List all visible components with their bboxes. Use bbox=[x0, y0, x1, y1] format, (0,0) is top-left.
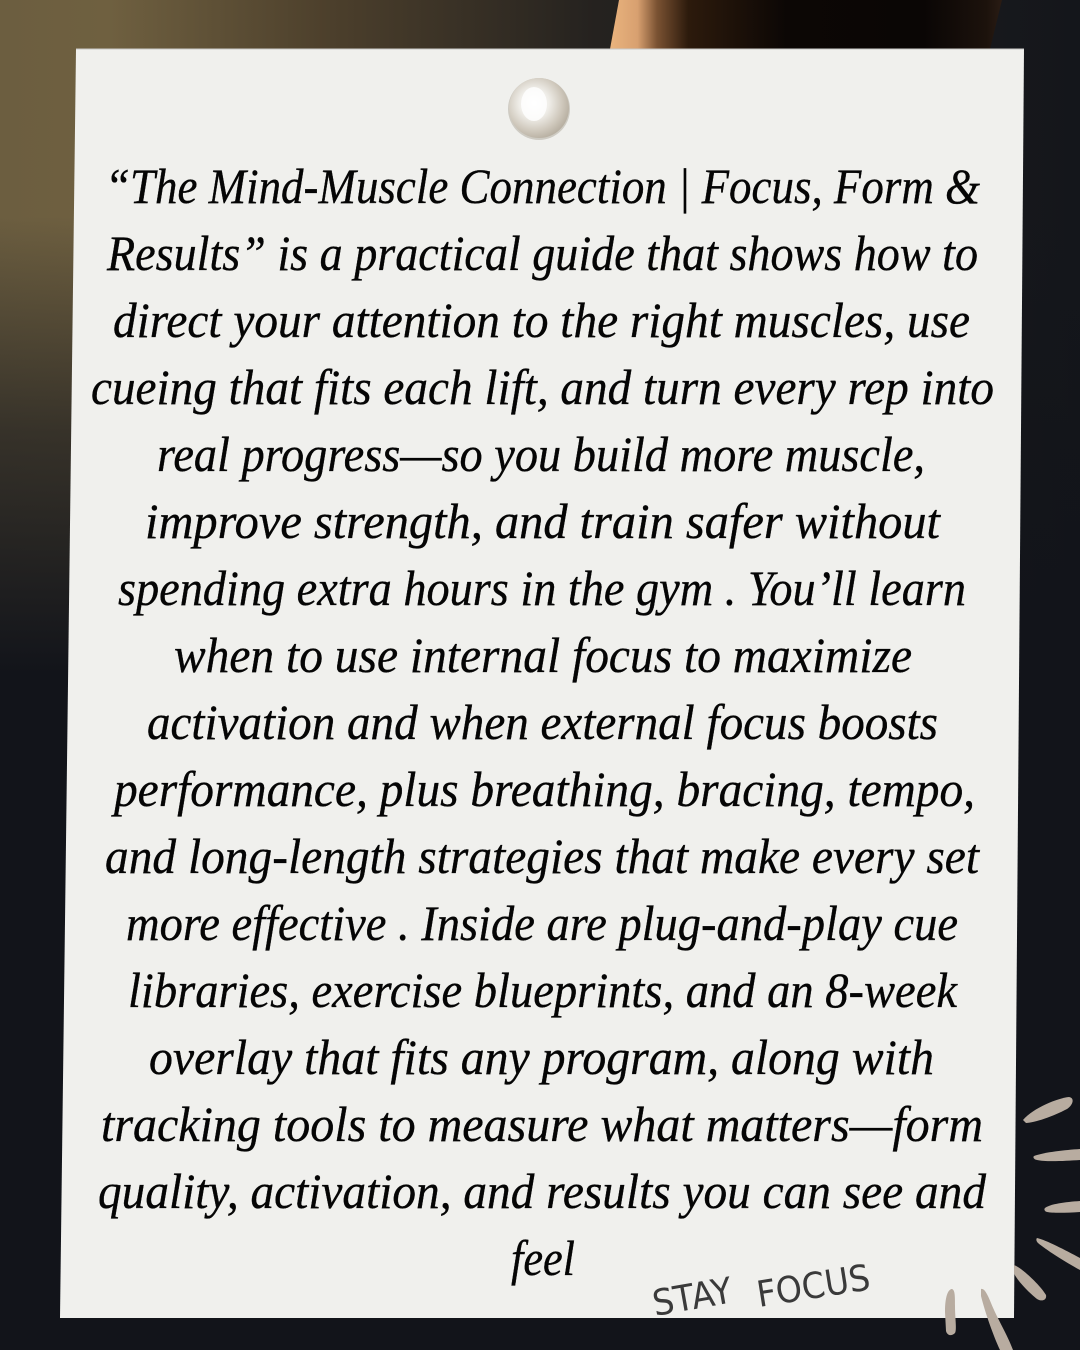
text block: description: quality, activation, and results you can see and bbox=[98, 1163, 987, 1219]
text block: description: more effective . Inside are plug-and-play cue bbox=[126, 895, 958, 951]
text block: description: improve strength, and train safer without bbox=[145, 493, 941, 549]
text block: description: and long-length strategies that make every set bbox=[105, 828, 980, 884]
text block: description: activation and when external focus boosts bbox=[147, 694, 938, 750]
text block: description: “The Mind-Muscle Connection | Focus, Form & bbox=[105, 158, 980, 214]
text block: description: spending extra hours in the gym . You’ll learn bbox=[118, 560, 966, 616]
text block: description: performance, plus breathing, bracing, tempo, bbox=[111, 761, 975, 817]
text block: description: overlay that fits any program, along with bbox=[149, 1029, 934, 1085]
handwritten note: stay focus bbox=[649, 1258, 873, 1325]
text block: description: real progress—so you build more muscle, bbox=[157, 426, 925, 482]
text block: description: cueing that fits each lift, and turn every rep into bbox=[91, 359, 994, 415]
handwritten note: stay focus: FOCUS bbox=[754, 1258, 873, 1316]
text block: description: direct your attention to the right muscles, use bbox=[113, 292, 970, 348]
forearm photo fragment bbox=[610, 0, 1002, 49]
icon: sunburst strokes bbox=[945, 1097, 1080, 1350]
text block: description: tracking tools to measure what matters—form bbox=[101, 1096, 983, 1152]
text block: description: feel bbox=[511, 1230, 575, 1286]
handwritten note: stay focus: STAY bbox=[649, 1270, 736, 1325]
text block: description: libraries, exercise blueprints, and an 8-week bbox=[128, 962, 958, 1018]
icon: pearl pin bbox=[508, 78, 570, 140]
text block: description: Results” is a practical guide that shows how to bbox=[106, 225, 978, 281]
text block: description: when to use internal focus to maximize bbox=[174, 627, 912, 683]
text block: description bbox=[91, 158, 994, 1286]
